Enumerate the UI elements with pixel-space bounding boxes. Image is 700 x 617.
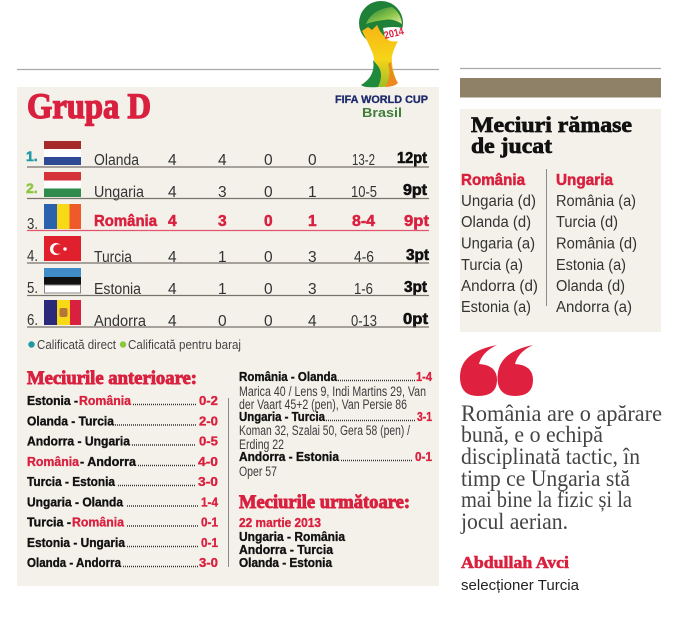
list: latest matches with scorers: Marica 40 / Lens 9, Indi Martins 29, Van xyxy=(239,384,426,399)
row: România: 4 xyxy=(168,213,177,230)
legend: qualification: Calificată pentru baraj xyxy=(128,337,241,352)
row: România: 8-4 xyxy=(352,213,375,230)
list: previous matches: 3-0 xyxy=(199,555,218,570)
list: latest matches with scorers: Koman 32, Szalai 50, Gera 58 (pen) / xyxy=(239,423,410,438)
logo text: FIFA World Cup Brasil: FIFA WORLD CUP xyxy=(335,94,428,106)
row: Ungaria: Ungaria xyxy=(94,184,144,201)
list: latest matches with scorers: Andorra - Estonia xyxy=(239,449,340,464)
list: latest matches with scorers: Erding 22 xyxy=(239,437,284,452)
row: Turcia: Turcia xyxy=(94,249,132,266)
list: latest matches with scorers: Oper 57 xyxy=(239,464,277,479)
list: previous matches: Olanda - Turcia xyxy=(27,414,115,428)
row: Ungaria xyxy=(26,172,429,201)
column: România: România xyxy=(461,172,525,189)
row: Olanda: 0 xyxy=(308,152,317,169)
list: latest matches with scorers: 3-1 xyxy=(417,409,432,424)
row: Olanda: 4 xyxy=(168,152,177,169)
row: Olanda: 4 xyxy=(218,152,227,169)
logo: FIFA World Cup trophy: 2014 xyxy=(383,25,405,42)
list: latest matches with scorers xyxy=(239,369,433,479)
column: România: Estonia (a) xyxy=(461,299,531,316)
row: România: România xyxy=(94,213,157,230)
column: Ungaria: Olanda (d) xyxy=(556,278,625,295)
row: Olanda: 12pt xyxy=(397,150,427,167)
column: Ungaria xyxy=(556,172,637,316)
logo: FIFA World Cup trophy xyxy=(359,1,405,87)
column: România: Olanda (d) xyxy=(461,214,531,231)
row: Estonia: 5. xyxy=(27,280,38,297)
row: Andorra: 0pt xyxy=(403,311,428,328)
logo text: FIFA World Cup Brasil: Brasil xyxy=(362,106,402,120)
list: previous matches: România xyxy=(27,454,80,469)
row: Andorra: 4 xyxy=(308,313,317,330)
row: Ungaria: 4 xyxy=(168,184,177,201)
list: previous matches: - Andorra xyxy=(80,454,137,469)
row: România: 3. xyxy=(27,216,38,233)
row: România: 1 xyxy=(308,213,317,230)
row: România: 3 xyxy=(218,213,227,230)
row: Estonia: 0 xyxy=(264,281,273,298)
row: Turcia: 0 xyxy=(264,249,273,266)
row: Andorra: 0 xyxy=(218,313,227,330)
column: Ungaria: Andorra (a) xyxy=(556,299,632,316)
row: Olanda: 13-2 xyxy=(352,152,375,169)
row: Ungaria: 1 xyxy=(308,184,317,201)
icon: quotation marks xyxy=(460,345,533,396)
row: Turcia: 1 xyxy=(218,249,227,266)
heading: Meciuri rămase de jucat: de jucat xyxy=(471,133,553,158)
row: Estonia: 3pt xyxy=(404,279,427,296)
column: Ungaria: România (d) xyxy=(556,236,637,252)
quote attribution: Abdullah Avci xyxy=(461,553,569,572)
quote attribution xyxy=(461,553,580,594)
column: România: Andorra (d) xyxy=(461,278,538,295)
list: previous matches: Olanda - Andorra xyxy=(27,555,122,570)
row: Andorra xyxy=(27,300,429,330)
row: Estonia: Estonia xyxy=(94,281,141,298)
heading: Meciuri rămase de jucat: Meciuri rămase xyxy=(471,112,632,137)
row: Andorra: 4 xyxy=(168,313,177,330)
row: Turcia: 3 xyxy=(308,249,317,266)
quote text: mai bine la fizic și la xyxy=(461,487,632,512)
row: Andorra: 0 xyxy=(264,313,273,330)
column: România: Turcia (a) xyxy=(461,257,523,274)
list: latest matches with scorers: Ungaria - Turcia xyxy=(239,409,326,424)
list: latest matches with scorers: România - Olanda xyxy=(239,369,338,384)
panel: Grupa D xyxy=(17,1,439,586)
row: Turcia: 4 xyxy=(168,249,177,266)
column: România: Ungaria (d) xyxy=(461,193,536,210)
list: previous matches: Ungaria - Olanda xyxy=(27,494,124,510)
quote text: România are o apărare xyxy=(461,401,662,426)
legend: qualification: Calificată direct xyxy=(37,337,116,352)
quote text: timp ce Ungaria stă xyxy=(461,466,630,491)
banner: brown bar xyxy=(460,78,661,98)
list: previous matches: Estonia - xyxy=(27,393,78,408)
row: Estonia: 3 xyxy=(308,281,317,298)
row: Andorra: Andorra xyxy=(94,313,146,330)
row: Estonia: 1 xyxy=(218,281,227,298)
list: previous matches: Turcia - Estonia xyxy=(27,474,116,489)
row: Turcia xyxy=(27,236,429,266)
table: standings xyxy=(26,141,429,330)
row: Olanda xyxy=(26,141,429,169)
list: next matches: 22 martie 2013 xyxy=(239,515,321,530)
list: previous matches: 4-0 xyxy=(198,454,218,469)
list: next matches: Olanda - Estonia xyxy=(239,555,333,570)
row: Estonia: 1-6 xyxy=(354,281,373,298)
row: Olanda: 1. xyxy=(26,148,38,164)
heading: Meciurile următoare: Meciurile următoare: xyxy=(239,492,410,513)
list: next matches xyxy=(239,515,346,570)
quote text: disciplinată tactic, în xyxy=(461,444,640,469)
list: latest matches with scorers: 0-1 xyxy=(415,449,432,464)
quote text: bună, e o echipă xyxy=(461,422,603,447)
list: next matches: Andorra - Turcia xyxy=(239,542,334,557)
column: Ungaria: Ungaria xyxy=(556,172,613,189)
list: previous matches: 0-5 xyxy=(199,434,218,448)
column: România xyxy=(461,172,538,316)
list: previous matches: 0-2 xyxy=(199,393,218,408)
row: România: 9pt xyxy=(404,213,429,230)
list: latest matches with scorers: 1-4 xyxy=(416,369,433,384)
list: previous matches: 0-1 xyxy=(201,514,218,530)
row: Olanda: Olanda xyxy=(94,152,139,169)
row: Ungaria: 9pt xyxy=(403,182,427,199)
row: Ungaria: 0 xyxy=(264,184,273,201)
list: previous matches: România xyxy=(72,514,125,530)
row: România xyxy=(27,204,429,233)
row: Ungaria: 10-5 xyxy=(351,184,377,201)
list: previous matches xyxy=(27,393,219,570)
heading: Grupa D: Grupa D xyxy=(27,86,151,126)
quote text xyxy=(460,401,662,534)
logo text: FIFA World Cup Brasil xyxy=(335,94,428,120)
list: previous matches: 0-1 xyxy=(201,535,218,550)
row: Andorra: 0-13 xyxy=(351,313,377,330)
row: Estonia xyxy=(27,268,429,298)
row: Turcia: 4. xyxy=(27,248,38,265)
row: Andorra: 6. xyxy=(27,312,38,329)
list: previous matches: Andorra - Ungaria xyxy=(27,434,131,448)
row: Olanda: 0 xyxy=(264,152,273,169)
list: previous matches: 2-0 xyxy=(199,414,218,428)
column: Ungaria: Estonia (a) xyxy=(556,257,626,274)
list: previous matches: 1-4 xyxy=(201,494,219,510)
row: România: 0 xyxy=(264,213,273,230)
list: latest matches with scorers: der Vaart 45+2 (pen), Van Persie 86 xyxy=(239,397,407,412)
list: previous matches: 3-0 xyxy=(198,474,218,489)
quote attribution: selecționer Turcia xyxy=(461,577,580,594)
list: previous matches: Estonia - Ungaria xyxy=(27,535,126,550)
heading: Meciuri rămase de jucat xyxy=(471,112,632,158)
row: Turcia: 4-6 xyxy=(354,249,374,266)
row: Ungaria: 2. xyxy=(26,180,38,196)
row: Estonia: 4 xyxy=(168,281,177,298)
row: Turcia: 3pt xyxy=(406,247,429,264)
legend: qualification xyxy=(28,337,241,352)
list: previous matches: Turcia - xyxy=(27,514,71,530)
quote text: jocul aerian. xyxy=(460,509,568,534)
column: Ungaria: Turcia (d) xyxy=(556,214,618,231)
row: Ungaria: 3 xyxy=(218,184,227,201)
list: next matches: Ungaria - România xyxy=(239,529,346,544)
column: România: Ungaria (a) xyxy=(461,236,535,252)
column: Ungaria: România (a) xyxy=(556,193,636,210)
list: previous matches: România xyxy=(79,393,132,408)
panel: remaining matches xyxy=(460,109,661,332)
heading: Meciurile anterioare: Meciurile anterioare: xyxy=(27,368,197,389)
